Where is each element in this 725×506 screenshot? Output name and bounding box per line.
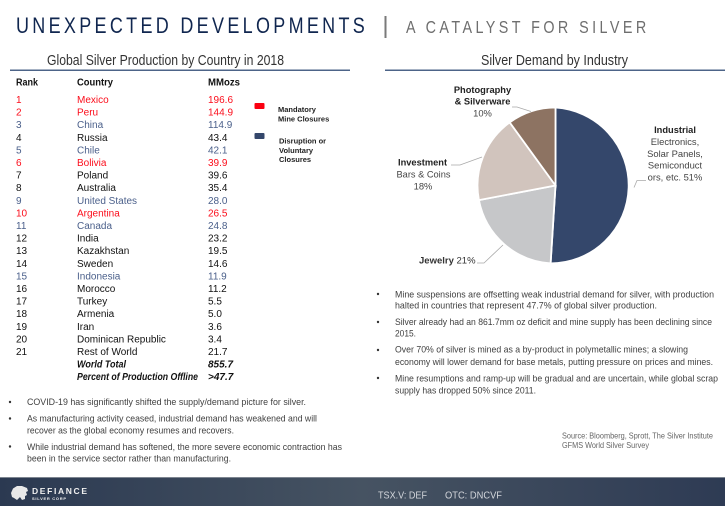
logo wordmark [32,486,87,501]
row: Indonesia [16,271,227,282]
row: Russia [16,133,228,144]
row: India [16,234,228,245]
legend: disruption or voluntary closures: Closures [279,155,311,164]
row: Indonesia: Indonesia [77,271,121,282]
row: Argentina: 10 [16,208,28,219]
row: Morocco: Morocco [77,284,116,295]
row: United States: 9 [16,196,22,207]
title [16,14,646,39]
row: Kazakhstan [16,246,228,257]
row: China: China [77,120,104,131]
row: Chile [16,145,228,156]
row: China [16,120,233,131]
heading: demand chart: Silver Demand by Industry [481,52,628,69]
footer bar [0,477,725,506]
row: Russia: 4 [16,133,22,144]
slice: industrial 51% [551,108,629,263]
slice: jewelry 21% [479,186,556,263]
row: Sweden: Sweden [77,259,113,270]
logo wordmark: DEFIANCE [32,486,87,496]
row: Sweden: 14 [16,259,28,270]
bullet: mine suspensions [377,290,714,310]
row: World Total: World Total [77,360,126,370]
logo wordmark: SILVER CORP [32,496,66,501]
legend: disruption or voluntary closures: Voluntary [279,146,314,155]
bullet: resumptions [377,374,718,395]
bullet: service sector: been in the service sector rather than manufacturing. [27,454,231,464]
row: Argentina [16,208,228,219]
label: industrial: Solar Panels, [647,148,703,159]
slice: photography 10% [510,108,556,186]
row: United States: 28.0 [208,196,228,207]
row: United States [16,196,228,207]
row: Argentina: 26.5 [208,208,228,219]
label: photography: Photography [454,85,512,95]
title: A CATALYST FOR SILVER [406,19,646,37]
row: Australia: 8 [16,183,22,194]
row: Kazakhstan: 13 [16,246,28,257]
row: Argentina: Argentina [77,208,120,219]
row: Armenia: 18 [16,309,28,320]
label: industrial: Electronics, [651,136,699,147]
bullet: deficit: 2015. [395,329,416,339]
ticker symbols: TSX.V: DEF [378,490,427,502]
row: Canada [16,221,228,232]
label: industrial [647,125,703,182]
row: Dominican Republic: 20 [16,334,28,345]
row: Kazakhstan: Kazakhstan [77,246,129,257]
label: investment: Bars & Coins [396,168,451,180]
row: Morocco: 16 [16,284,28,295]
row: India: 23.2 [208,234,228,245]
legend [254,103,329,164]
label: industrial: Industrial [654,125,696,135]
bullet: manufacturing [9,414,317,435]
row: Rest of World: Rest of World [77,347,137,358]
bullet: service sector [9,442,342,464]
label: photography [454,85,512,118]
row: Sweden [16,259,228,270]
row: Iran: 3.6 [208,322,222,333]
row: Peru: 2 [16,108,22,119]
table header: MMozs [208,78,240,88]
row: Rest of World: 21 [16,347,28,358]
row: Armenia [16,309,222,320]
table header: Country [77,78,113,88]
row: World Total: 855.7 [208,360,233,370]
row: China: 114.9 [208,120,233,131]
label: jewelry: Jewelry 21% [419,256,476,266]
table header [16,78,240,88]
text block: right bullets [377,290,718,395]
row: Indonesia: 11.9 [208,271,227,282]
row: Australia: Australia [77,183,116,194]
label: industrial: Semiconduct [648,160,702,170]
heading: production table: Global Silver Production by Country in 2018 [47,52,284,69]
label: photography: 10% [473,108,492,118]
legend: disruption or voluntary closures [254,133,326,164]
bullet: service sector: While industrial demand has softened, the more severe economic contraction has [27,442,342,452]
label: industrial: ors, etc. 51% [648,172,702,182]
row: Australia [16,183,228,194]
row: Bolivia: 39.9 [208,158,228,169]
bullet: by-product: Over 70% of silver is mined as a by-product in polymetallic mines; a slowing [395,345,688,355]
row: Morocco [16,284,227,295]
row: Turkey: Turkey [77,297,107,308]
legend: disruption or voluntary closures: Disruption or [279,136,326,146]
bullet: manufacturing: As manufacturing activity ceased, industrial demand has weakened and will [27,414,317,424]
label: investment: Investment [398,158,447,168]
table: silver production by country [16,78,240,383]
row: Peru: 144.9 [208,108,233,119]
ticker symbols [378,490,502,502]
title: UNEXPECTED DEVELOPMENTS [16,14,365,39]
row: Turkey [16,297,222,308]
row: Indonesia: 15 [16,271,28,282]
row: Poland: 39.6 [208,171,228,182]
bullet: mine suspensions: Mine suspensions are offsetting weak industrial demand for silver, with production [395,290,714,300]
label: investment [396,158,451,192]
row: China: 3 [16,120,22,131]
row: Peru: Peru [77,108,98,119]
row: Peru [16,108,233,119]
row: Bolivia: 6 [16,158,22,169]
row: Turkey: 17 [16,297,28,308]
row: Australia: 35.4 [208,183,228,194]
row: United States: United States [77,196,137,207]
bullet: by-product [377,345,713,367]
text block: left bullets [9,397,342,464]
row: World Total [77,360,233,370]
row: Morocco: 11.2 [208,284,227,295]
leader lines [451,107,646,263]
row: Sweden: 14.6 [208,259,228,270]
row: Mexico: 1 [16,95,22,106]
pie chart: silver demand by industry [478,108,629,263]
row: Chile: Chile [77,145,100,156]
row: Percent of Production Offline: Percent of Production Offline [77,372,198,383]
row: Poland [16,171,228,182]
label: photography: & Silverware [455,96,510,106]
row: India: 12 [16,234,28,245]
bullet: manufacturing: recover as the global economy resumes and recovers. [27,425,234,435]
row: Canada: 24.8 [208,221,228,232]
row: Mexico: 196.6 [208,95,233,106]
bullet: covid: COVID-19 has significantly shifted the supply/demand picture for silver. [27,397,306,407]
legend: mandatory mine closures: Mandatory [278,105,317,114]
row: Dominican Republic: 3.4 [208,334,222,345]
row: Dominican Republic: Dominican Republic [77,334,166,345]
row: Dominican Republic [16,334,222,345]
row: Poland: 7 [16,171,22,182]
row: India: India [77,234,99,245]
row: Rest of World: 21.7 [208,347,228,358]
table header: Rank [16,78,38,88]
row: Iran [16,322,222,333]
row: Armenia: 5.0 [208,309,222,320]
legend: mandatory mine closures [254,103,329,124]
row: Turkey: 5.5 [208,297,222,308]
row: Iran: Iran [77,322,94,333]
slice: investment 18% [478,122,556,200]
bullet: deficit [377,317,712,339]
row: Bolivia: Bolivia [77,158,107,169]
source note: Source: Bloomberg, Sprott, The Silver Institute [562,432,713,440]
row: Iran: 19 [16,322,28,333]
row: Russia: Russia [77,133,108,144]
source note: GFMS World Silver Survey [562,441,649,450]
row: Bolivia [16,158,228,169]
row: Rest of World [16,347,228,358]
row: Canada: Canada [77,221,112,232]
label: investment: 18% [414,180,432,192]
row: Chile: 5 [16,145,22,156]
row: Poland: Poland [77,171,108,182]
legend: mandatory mine closures: Mine Closures [278,114,329,124]
ticker symbols: OTC: DNCVF [445,490,502,502]
bullet: mine suspensions: halted in countries that represent 47.7% of global silver production. [395,300,657,310]
source note [562,432,713,450]
bullet: resumptions: supply has dropped 50% since 2011. [395,385,536,395]
row: Chile: 42.1 [208,145,228,156]
row: Mexico: Mexico [77,95,109,106]
row: Mexico [16,95,233,106]
icon: lion logo [11,486,28,500]
row: Armenia: Armenia [77,309,115,320]
row: Russia: 43.4 [208,133,228,144]
row: Percent of Production Offline: >47.7 [208,372,234,383]
row: Kazakhstan: 19.5 [208,246,228,257]
row: Canada: 11 [16,221,27,232]
